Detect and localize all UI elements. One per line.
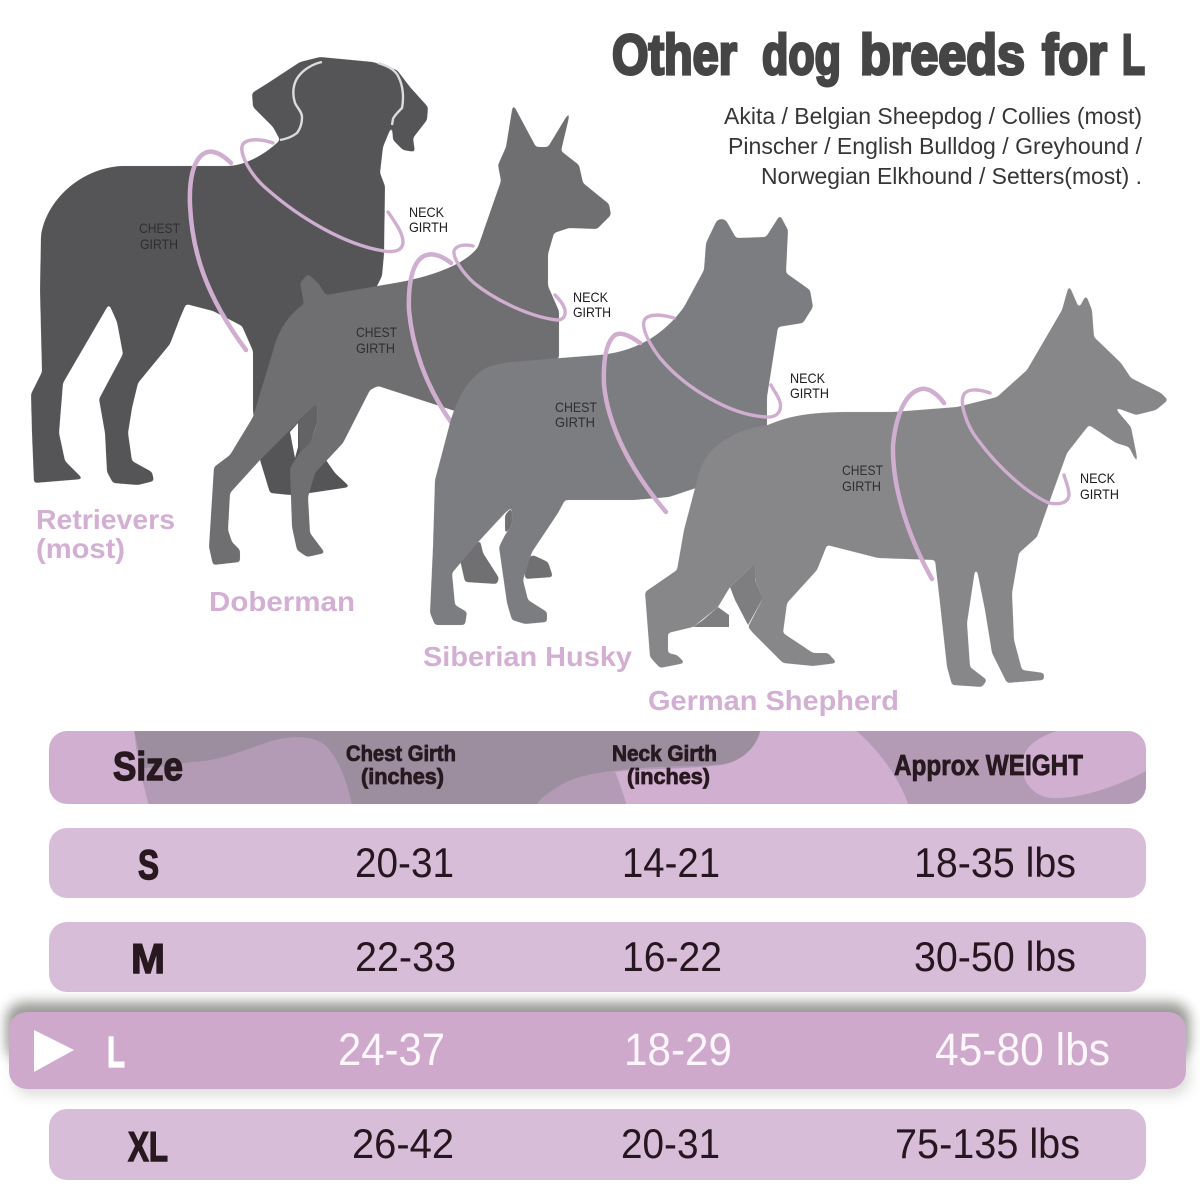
neck girth ring [454,245,565,320]
title: breeds [860,23,1025,87]
label: chest girth [555,399,597,430]
label: neck girth: GIRTH [573,304,611,320]
row: size M: 16-22 [622,933,722,980]
neck girth ring [242,140,403,252]
silhouette: husky [430,215,813,625]
table header row [49,728,1148,806]
head outline highlight [280,62,403,140]
silhouette: shepherd [645,285,1168,687]
far legs: shepherd [693,563,763,627]
label: chest girth [139,220,180,252]
row: size S: 18-35 lbs [914,839,1076,886]
row: size L highlighted: L [107,1028,125,1077]
dog: siberian husky [423,215,829,672]
label: neck girth [1080,470,1119,502]
row: size M: M [131,935,165,982]
header: size: Size [113,745,183,789]
silhouette: retriever [31,57,428,495]
header: chest girth: Chest Girth [346,741,456,766]
breed name: retrievers [36,504,175,564]
neck girth ring [644,315,780,417]
breed name: retrievers: Retrievers [36,504,175,535]
row: size XL: 20-31 [621,1120,720,1167]
breed name: retrievers: (most) [36,533,125,564]
gap between retriever legs [290,423,298,458]
text block: other breeds list [724,103,1143,189]
dog: german shepherd [645,285,1168,716]
row: size XL [49,1109,1146,1180]
title: dog [762,23,841,87]
row: size L highlighted [6,1002,1190,1096]
breed name: german shepherd: German Shepherd [648,685,899,716]
far hind leg: doberman [298,403,317,452]
dog: retriever [31,57,448,564]
dog: doberman [209,104,611,617]
label: chest girth: CHEST [555,399,597,415]
label: neck girth: GIRTH [790,385,829,401]
text block: other breeds list: Akita / Belgian Sheepdog / Collies (most) [724,103,1142,129]
row: size S [49,828,1146,898]
label: chest girth: GIRTH [555,414,595,430]
row: size XL: 26-42 [352,1120,454,1167]
breed name: siberian husky: Siberian Husky [423,641,632,672]
header: chest girth: (inches) [361,764,444,789]
label: chest girth: CHEST [842,462,883,478]
text block: other breeds list: Norwegian Elkhound / Setters(most) . [761,163,1142,189]
label: neck girth: GIRTH [1080,486,1119,502]
header: neck girth: Neck Girth [612,741,717,766]
label: neck girth [409,204,448,235]
neck girth ring [962,390,1069,504]
label: neck girth: GIRTH [409,219,448,235]
far legs: husky [460,507,553,584]
row: size L highlighted: 24-37 [338,1024,445,1075]
row: size L highlighted: 18-29 [624,1024,732,1075]
header: neck girth: (inches) [627,764,710,789]
chest girth ring [893,389,944,579]
label: chest girth: GIRTH [842,478,881,494]
label: neck girth [790,370,829,401]
icon: selection arrow [34,1030,74,1072]
highlight shadow [6,1002,1190,1096]
row: size S: 14-21 [622,839,720,886]
label: chest girth: GIRTH [140,236,178,252]
chest girth ring [190,152,246,350]
title: for [1042,23,1107,87]
row: size XL: 75-135 lbs [895,1120,1080,1167]
row: size M: 30-50 lbs [914,933,1076,980]
chest girth ring [604,334,666,512]
label: chest girth: GIRTH [356,340,395,356]
label: neck girth: NECK [409,204,445,220]
row: size S: 20-31 [355,839,454,886]
title: L [1122,23,1145,87]
row: size S: S [138,841,159,888]
row: size XL: XL [128,1123,168,1170]
header: neck girth [612,741,717,789]
title: Other [612,23,737,87]
label: chest girth: CHEST [356,324,397,340]
label: neck girth: NECK [1080,470,1116,486]
text block: other breeds list: Pinscher / English Bulldog / Greyhound / [728,133,1143,159]
silhouette: doberman [209,104,611,565]
label: chest girth [356,324,397,356]
label: neck girth: NECK [573,289,609,305]
label: chest girth: CHEST [139,220,180,236]
chest girth ring [409,254,451,422]
header: approx weight: Approx WEIGHT [894,750,1083,782]
breed name: doberman: Doberman [209,586,355,617]
label: neck girth [573,289,611,320]
label: neck girth: NECK [790,370,826,386]
row: size M [49,922,1146,992]
row: size M: 22-33 [355,933,456,980]
row: size L highlighted: 45-80 lbs [935,1024,1110,1075]
label: chest girth [842,462,883,494]
header: chest girth [346,741,456,789]
